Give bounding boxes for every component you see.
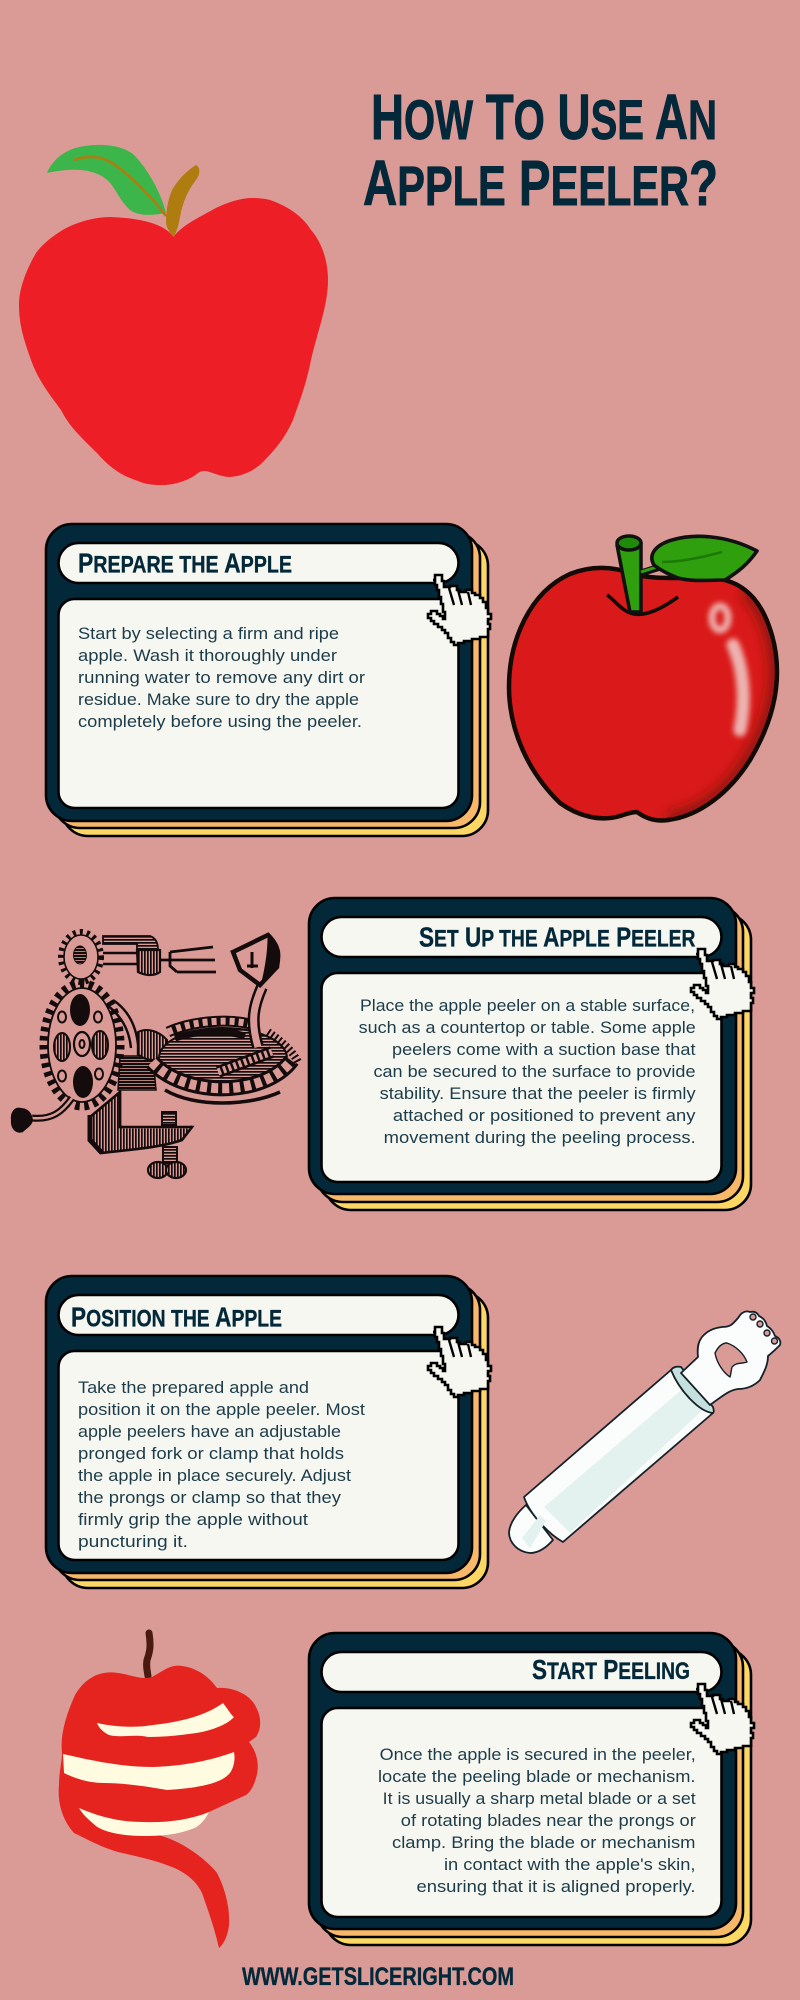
illustration: hand-held peeler tool — [509, 1311, 780, 1553]
heading bar — [58, 1295, 458, 1335]
stem — [147, 1633, 150, 1676]
body text — [378, 1746, 696, 1896]
blade carriage — [218, 1052, 272, 1072]
peeling dish — [152, 1021, 298, 1103]
title — [363, 81, 718, 219]
body text: the apple in place securely. Adjust — [78, 1467, 351, 1485]
card 1: prepare the apple — [46, 524, 491, 836]
apple body — [509, 568, 777, 821]
body text — [359, 997, 696, 1147]
apple body — [19, 198, 328, 485]
body text: residue. Make sure to dry the apple — [78, 691, 359, 709]
apple shading — [668, 590, 777, 820]
body text: Take the prepared apple and — [78, 1379, 309, 1397]
flesh band 1 — [97, 1703, 234, 1737]
card 2: set up the apple peeler — [309, 898, 754, 1210]
leaf stalk — [641, 567, 660, 573]
blade head — [681, 1311, 780, 1405]
icon: pointing hand — [428, 575, 491, 645]
red peel — [59, 1666, 260, 1948]
heading: PREPARE THE APPLE — [78, 548, 292, 579]
body text — [78, 1379, 365, 1551]
body text: firmly grip the apple without — [78, 1511, 309, 1529]
apple leaf — [47, 145, 166, 215]
body text: pronged fork or clamp that holds — [78, 1445, 344, 1463]
small gear — [61, 932, 101, 982]
leaf vein — [74, 157, 166, 216]
heading: START PEELING — [532, 1654, 690, 1685]
flesh band 3 — [79, 1808, 209, 1836]
body text: locate the peeling blade or mechanism. — [378, 1768, 696, 1786]
dish right rim — [268, 1032, 298, 1062]
handle end cap — [509, 1505, 553, 1553]
fork arm — [103, 936, 216, 975]
clamp screw and wing nut — [148, 1112, 186, 1178]
body text — [78, 625, 366, 731]
drive cone — [138, 1030, 167, 1060]
body text: can be secured to the surface to provide — [374, 1063, 696, 1081]
body text: Place the apple peeler on a stable surface, — [360, 997, 695, 1015]
blade arm — [233, 935, 278, 1047]
curved gear arm — [107, 1000, 138, 1060]
body text: apple. Wash it thoroughly under — [78, 647, 338, 665]
card layers — [309, 1633, 751, 1945]
apple stem — [166, 165, 199, 237]
handle body — [524, 1370, 713, 1542]
body panel — [322, 1708, 722, 1917]
body text: the prongs or clamp so that they — [78, 1489, 342, 1507]
leaf — [652, 536, 757, 580]
body text: movement during the peeling process. — [384, 1129, 696, 1147]
dish upper teeth — [168, 1021, 250, 1032]
illustration: vintage apple peeler engraving — [11, 932, 298, 1178]
footer website: WWW.GETSLICERIGHT.COM — [242, 1963, 514, 1991]
apple flesh — [63, 1753, 235, 1836]
body text: stability. Ensure that the peeler is firmly — [380, 1085, 696, 1103]
card 3: position the apple — [46, 1276, 491, 1588]
apple outline — [509, 568, 777, 821]
card layers — [46, 524, 488, 836]
illustration: spiral peeled apple — [59, 1633, 260, 1948]
body text: It is usually a sharp metal blade or a set — [383, 1790, 696, 1808]
title: APPLE PEELER? — [363, 147, 718, 219]
collar — [671, 1367, 714, 1413]
body text: of rotating blades near the prongs or — [401, 1812, 696, 1830]
body text: in contact with the apple's skin, — [444, 1856, 696, 1874]
body text: Once the apple is secured in the peeler, — [380, 1746, 696, 1764]
body panel — [322, 973, 722, 1182]
drive block — [118, 1056, 156, 1090]
heading: SET UP THE APPLE PEELER — [419, 922, 695, 953]
body text: ensuring that it is aligned properly. — [416, 1878, 696, 1896]
table clamp — [90, 1090, 192, 1153]
body text: attached or positioned to prevent any — [393, 1107, 696, 1125]
heading bar — [58, 543, 458, 583]
body panel — [58, 599, 458, 808]
icon: pointing hand — [428, 1327, 491, 1397]
crank handle — [11, 1098, 72, 1133]
heading bar — [322, 1652, 722, 1692]
body text: completely before using the peeler. — [78, 713, 362, 731]
card layers — [309, 898, 751, 1210]
card 4: start peeling — [309, 1633, 754, 1945]
stem — [617, 543, 641, 612]
body text: position it on the apple peeler. Most — [78, 1401, 365, 1419]
blade holes — [750, 1314, 778, 1344]
large gear — [44, 984, 120, 1106]
icon: pointing hand — [691, 949, 754, 1019]
body panel — [58, 1351, 458, 1560]
flesh band 2 — [63, 1752, 235, 1790]
stem top — [617, 536, 641, 550]
illustration: glossy red apple — [509, 536, 777, 821]
body text: apple peelers have an adjustable — [78, 1423, 341, 1441]
body text: puncturing it. — [78, 1533, 188, 1551]
dimple — [607, 595, 678, 614]
blade slot — [715, 1343, 747, 1377]
body text: Start by selecting a firm and ripe — [78, 625, 339, 643]
body text: peelers come with a suction base that — [392, 1041, 696, 1059]
body text: running water to remove any dirt or — [78, 669, 366, 687]
illustration: large red apple — [19, 145, 328, 485]
body text: such as a countertop or table. Some apple — [359, 1019, 696, 1037]
handle stripe — [544, 1386, 706, 1533]
icon: pointing hand — [691, 1684, 754, 1754]
dish lower teeth — [152, 1060, 292, 1088]
body text: clamp. Bring the blade or mechanism — [392, 1834, 696, 1852]
heading bar — [322, 917, 722, 957]
title: HOW TO USE AN — [371, 81, 717, 153]
highlights — [712, 606, 743, 730]
heading: POSITION THE APPLE — [71, 1302, 282, 1333]
card layers — [46, 1276, 488, 1588]
